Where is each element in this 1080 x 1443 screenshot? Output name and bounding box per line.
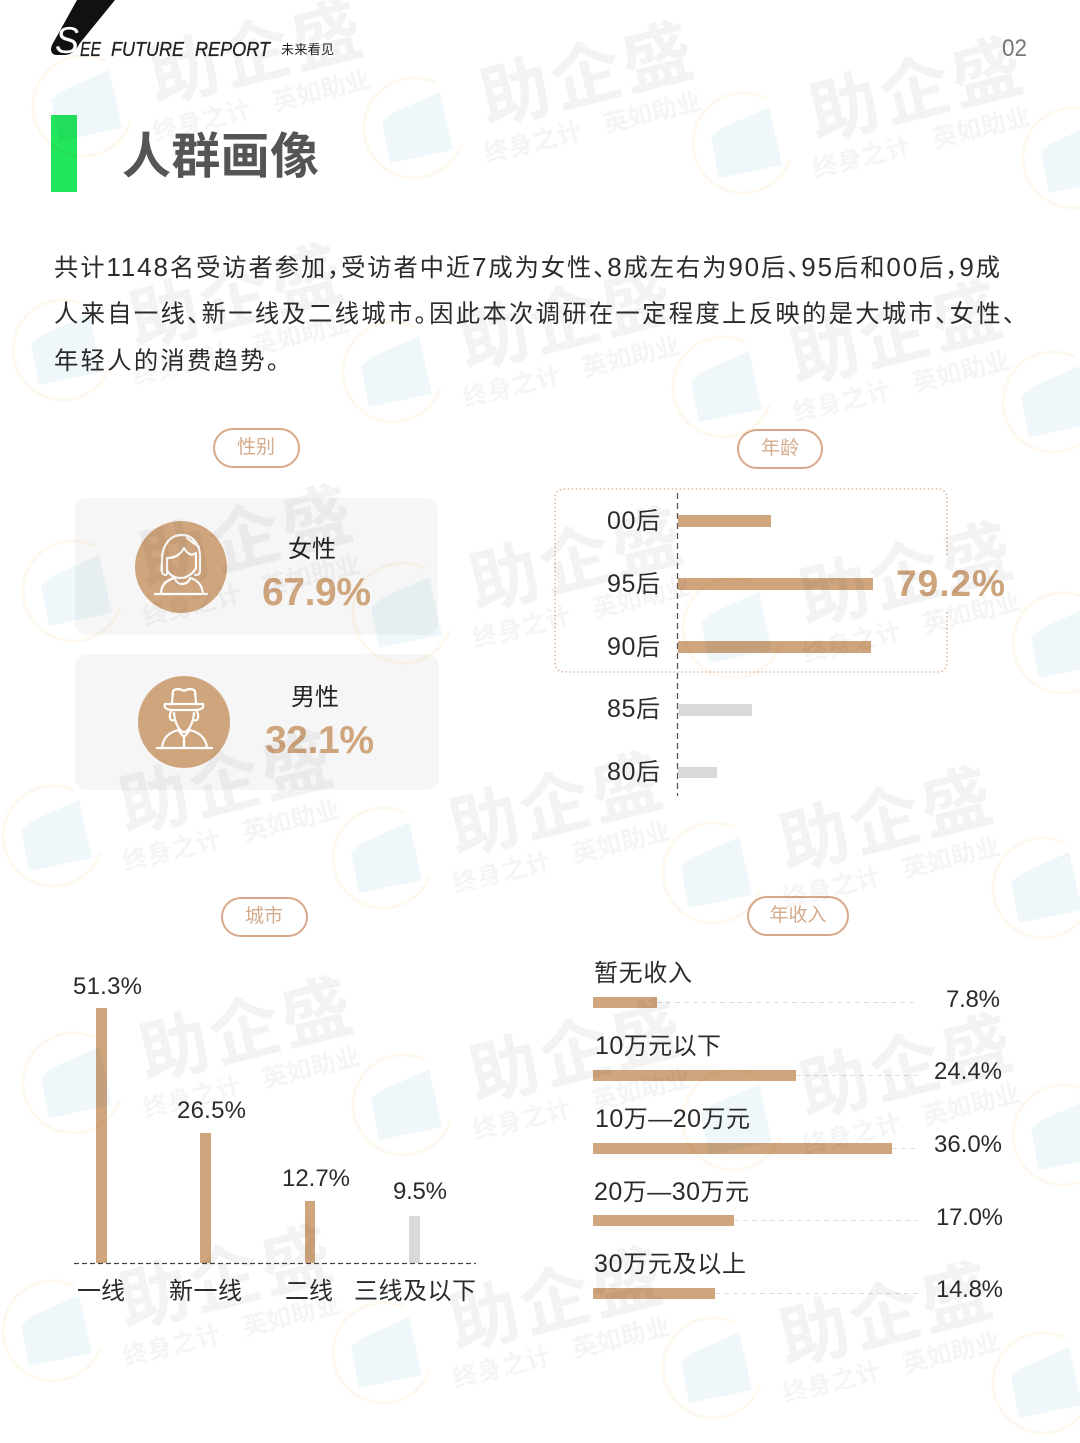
value: female share: 67.9% [262,571,371,614]
logo: See Future Report [51,0,334,61]
logo wordmark: REPORT [195,38,271,61]
icon: woman avatar [135,521,227,613]
watermark overlay: 英如助业 [899,832,1003,884]
icon: man avatar [138,676,230,768]
watermark overlay: 终身之计 [120,824,224,877]
bar chart: age groups: 80后 [607,758,660,786]
logo wordmark: FUTURE [111,38,184,61]
bar chart: income brackets: 暂无收入 [594,960,692,987]
logo Chinese tagline: 未来看见 [281,42,334,57]
card: female [75,498,438,635]
panel: annual income [593,897,1003,1303]
bar chart: city tiers: 12.7% [282,1165,350,1192]
watermark overlay: 助企盛 [441,1237,669,1365]
callout: dotted highlight box [555,489,947,672]
watermark overlay: 英如助业 [259,1042,363,1094]
pill label: age: 年龄 [761,437,799,459]
logo letter S: S [55,20,79,61]
pill label: city [222,898,307,936]
bar chart: age groups: 95后 [607,570,660,598]
bar chart: city tiers: 一线 [77,1278,125,1305]
bar chart: city tiers: 9.5% [393,1178,447,1205]
pill label: city: 城市 [245,905,283,927]
bar chart: city tiers: 三线及以下 [354,1278,476,1305]
bar chart: city tiers: 新一线 [169,1278,242,1305]
watermark overlay: 英如助业 [899,1327,1003,1379]
title: 人群画像 [122,130,319,184]
watermark overlay: 终身之计 [810,131,914,184]
watermark overlay: 英如助业 [569,817,673,869]
watermark overlay: 助企盛 [451,256,679,384]
pill label: gender [214,429,299,467]
watermark overlay: 英如助业 [919,1079,1023,1131]
intro text block: 年轻人的消费趋势。 [54,348,279,375]
bar chart: income brackets: 36.0% [934,1131,1002,1158]
pill label: income [748,897,848,935]
bar chart: income brackets: 10万元以下 [595,1032,721,1060]
watermark overlay: 终身之计 [130,338,234,391]
watermark overlay: 助企盛 [131,967,359,1095]
watermark overlay: 助企盛 [801,27,1029,155]
watermark overlay: 助企盛 [771,1252,999,1380]
watermark overlay: 助企盛 [771,757,999,885]
watermark overlay: 终身之计 [470,601,574,654]
icon: black slanted logo mark [51,0,115,55]
watermark overlay: 英如助业 [909,346,1013,398]
card: male [75,654,439,790]
watermark overlay: 终身之计 [460,360,564,413]
label: male: 男性 [291,684,339,711]
watermark overlay: 终身之计 [450,846,554,899]
watermark overlay: 终身之计 [800,1108,904,1161]
logo wordmark: EE [80,38,101,61]
watermark overlay: 助企盛 [472,12,700,140]
watermark overlay: 终身之计 [140,579,244,632]
bar chart: income brackets: 10万—20万元 [595,1105,750,1133]
watermark overlay: 英如助业 [269,65,373,117]
watermark overlay: 终身之计 [140,1071,244,1124]
callout value: 79.2% [896,563,1005,604]
watermark overlay: 助企盛 [461,497,689,625]
watermark overlay: 英如助业 [600,87,704,139]
bar chart: income brackets: 20万—30万元 [594,1178,749,1206]
watermark overlay: 终身之计 [800,616,904,669]
watermark overlay: 英如助业 [569,1312,673,1364]
bar chart: age groups: 85后 [607,695,660,723]
bar chart: income brackets: 30万元及以上 [594,1250,746,1278]
heading marker: green bar [51,115,77,192]
watermark overlay: 终身之计 [790,375,894,428]
pill label: gender: 性别 [237,436,275,458]
watermark overlay: 英如助业 [239,1290,343,1342]
watermark overlay: 英如助业 [919,587,1023,639]
watermark overlay: 助企盛 [791,512,1019,640]
watermark overlay: 助企盛 [131,475,359,603]
value: male share: 32.1% [265,719,374,762]
watermark overlay: 终身之计 [780,1356,884,1409]
bar chart: income brackets: 24.4% [934,1058,1002,1085]
watermark overlay: 助企盛 [461,989,689,1117]
watermark overlay: 终身之计 [450,1341,554,1394]
bar chart: age groups: 00后 [607,507,660,535]
watermark overlay: 英如助业 [589,572,693,624]
watermark overlay: 英如助业 [239,795,343,847]
watermark overlay: 英如助业 [929,102,1033,154]
intro text block: 人来自一线、新一线及二线城市。因此本次调研在一定程度上反映的是大城市、女性、 [54,301,1015,328]
bar chart: city tiers [73,973,476,1305]
panel: gender [75,429,439,790]
bar chart: city tiers: 二线 [285,1278,333,1305]
bar chart: income brackets: 17.0% [936,1204,1003,1231]
bar chart: income brackets: 14.8% [936,1276,1003,1303]
watermark overlay: 终身之计 [150,94,254,147]
panel: age [555,430,1005,796]
page number: 02 [1002,35,1027,62]
watermark overlay: 助企盛 [791,1004,1019,1132]
bar chart: age groups: 90后 [607,633,660,661]
watermark overlay: 终身之计 [481,116,585,169]
bar chart: income brackets [593,960,1003,1303]
panel: city [73,898,476,1305]
pill label: income: 年收入 [769,904,827,926]
age axis [676,493,678,796]
watermark overlay: 助企盛 [111,1215,339,1343]
watermark overlay: 英如助业 [249,309,353,361]
bar chart: income brackets: 7.8% [946,986,1000,1013]
watermark overlay: 助企盛 [441,742,669,870]
watermark overlay: 英如助业 [579,331,683,383]
watermark overlay: 终身之计 [470,1093,574,1146]
watermark overlay: 助企盛 [781,271,1009,399]
watermark overlay: 终身之计 [780,861,884,914]
watermark overlay: 英如助业 [589,1064,693,1116]
logo wordmark [80,38,271,61]
intro text block [54,252,1015,375]
intro text block: 共计1148名受访者参加，受访者中近7成为女性、8成左右为90后、95后和00后，9成 [54,252,1000,282]
watermark overlay: 英如助业 [259,550,363,602]
watermark overlay: 助企盛 [111,720,339,848]
watermark overlay: 助企盛 [121,234,349,362]
bar chart: city tiers: 26.5% [177,1097,246,1124]
bar chart: city tiers: 51.3% [73,973,142,1000]
label: female: 女性 [288,536,336,563]
bar chart: age groups [607,507,873,786]
watermark overlay: 终身之计 [120,1319,224,1372]
pill label: age [738,430,822,468]
